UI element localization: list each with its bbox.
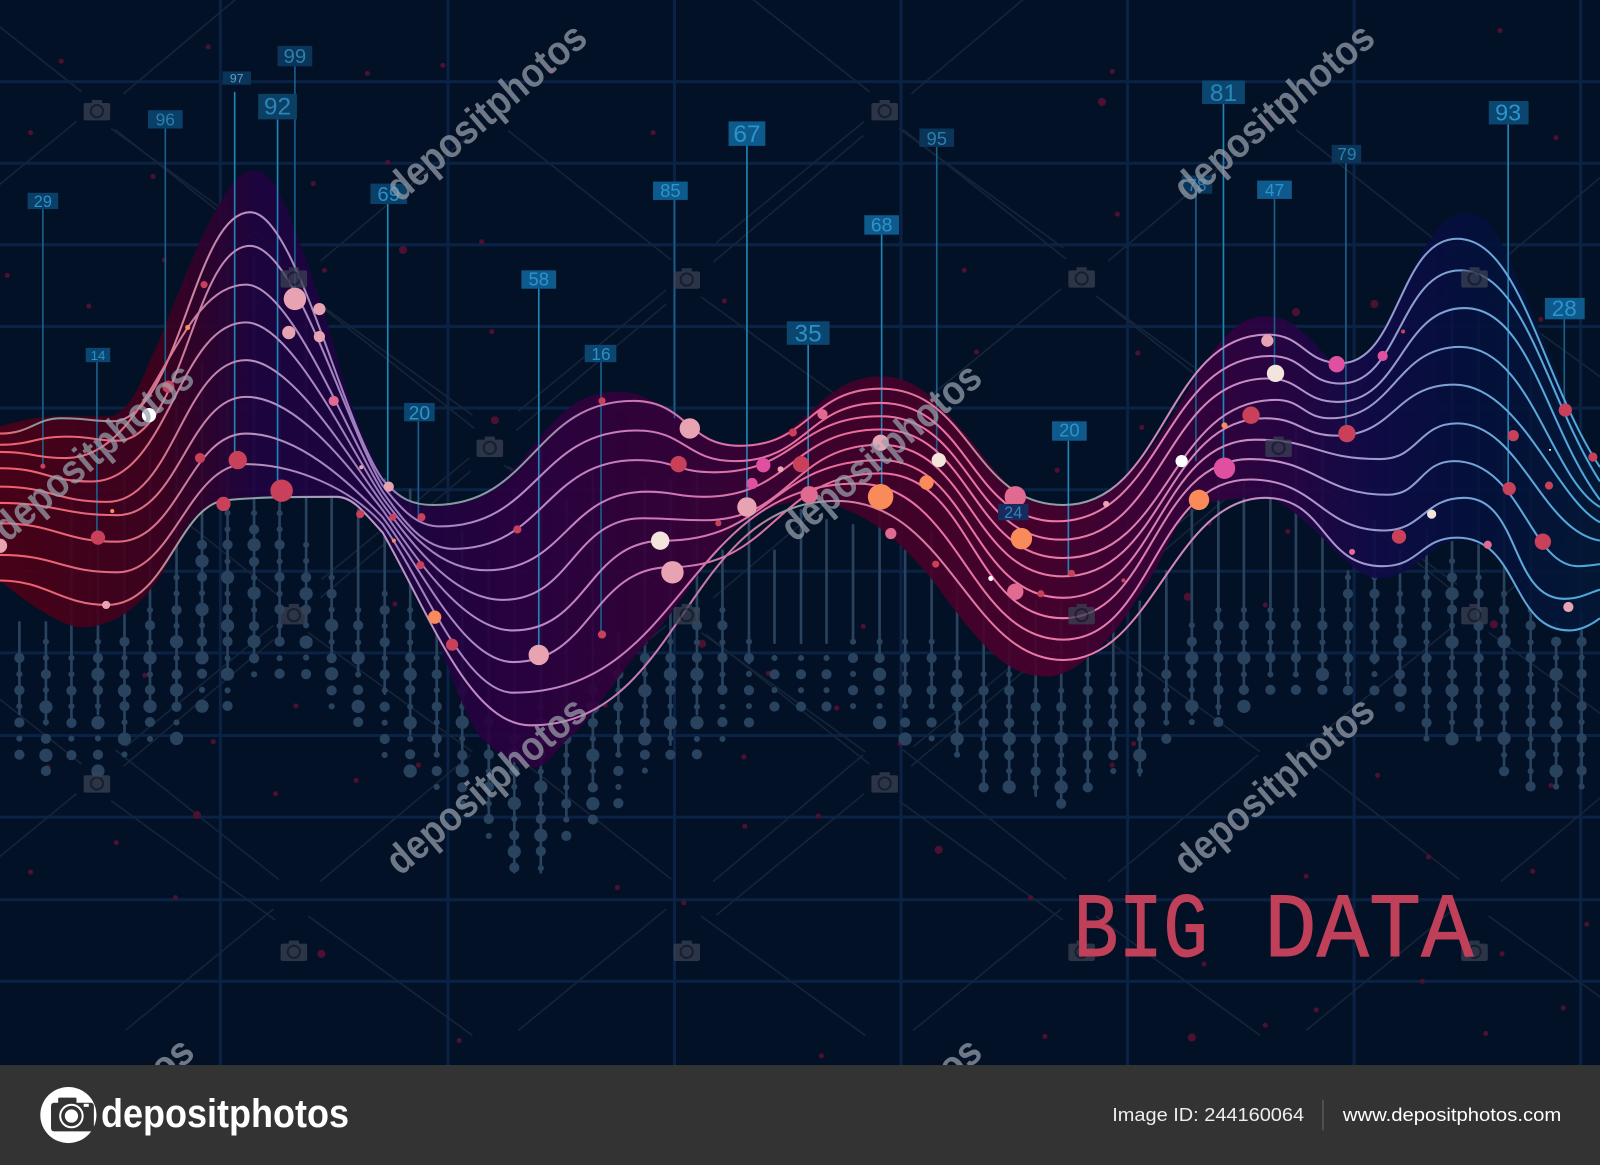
small column dots [19,513,1582,869]
label 47: 47 [1265,180,1284,200]
label 28 [1545,296,1585,321]
label 20 left: 20 [409,402,430,424]
data label stems [43,66,1564,655]
label 96: 96 [156,109,175,129]
image id: Image ID: 244160064 [1112,1104,1304,1125]
label 20 right: 20 [1059,420,1080,441]
title: BIG DATA [1073,880,1474,984]
label 29 [28,193,58,211]
wave lines [0,212,1600,725]
wave line 9 [0,497,1600,725]
label 95: 95 [927,128,947,149]
label 67: 67 [733,121,761,148]
label 16: 16 [591,344,611,364]
watermark text: depositphotos [1164,687,1383,883]
label 20 right [1052,420,1087,441]
wave line 4 [0,322,1600,570]
label 58 [521,269,556,290]
label 16 [585,344,616,364]
label 68 [864,215,899,237]
label 47 [1257,180,1292,200]
watermark cameras [84,100,1488,961]
label 79: 79 [1337,144,1357,164]
label 69 [370,184,407,206]
label 92: 92 [264,93,291,120]
large column dots [46,545,1556,869]
data labels [28,46,1585,522]
label 35 [787,321,830,348]
label 14: 14 [91,348,105,363]
icon: logo camera [40,1087,96,1143]
wave line 6 [0,397,1600,630]
watermark text: tos [919,1027,990,1098]
label 78: 78 [1187,175,1207,195]
label 96 [148,109,183,129]
label 93: 93 [1495,99,1521,125]
label 35: 35 [795,321,822,348]
label 68: 68 [871,215,892,237]
wave line 8 [0,464,1600,693]
footer logo text: depositphotos [101,1092,349,1136]
title: BIG DATA: BIG [1073,880,1208,984]
watermark text: depositphotos [771,353,990,550]
label 85: 85 [660,180,681,201]
label 58: 58 [529,269,549,290]
watermark text: tos [131,1027,203,1098]
dot columns [19,257,1582,872]
wave line 7 [0,434,1600,662]
label 99 [278,46,312,68]
label 24: 24 [1004,504,1022,522]
label 79 [1332,144,1361,164]
label 93 [1489,99,1529,125]
wave band fill [0,170,1600,767]
label 97 [222,71,251,86]
label 81: 81 [1210,80,1237,107]
label 81 [1202,80,1245,107]
label 78 [1182,175,1212,195]
data point markers [0,281,1597,665]
footer bar [0,1065,1600,1165]
label 95 [919,128,954,149]
medium column dots [19,529,1582,869]
label 97: 97 [230,72,244,86]
title: BIG DATA: DATA [1264,880,1474,984]
wave line 1 [0,212,1600,505]
wave line 3 [0,285,1600,549]
label 29: 29 [34,193,52,211]
label 85 [653,180,688,201]
label 14 [86,348,110,363]
wave line 2 [0,246,1600,526]
label 99: 99 [284,46,306,68]
column lines [19,257,1582,872]
label 28: 28 [1552,296,1577,321]
label 69: 69 [377,184,400,206]
label 24 [998,504,1029,522]
watermark text: depositphotos [376,687,595,883]
website url: www.depositphotos.com [1342,1104,1561,1125]
wave line 5 [0,360,1600,600]
